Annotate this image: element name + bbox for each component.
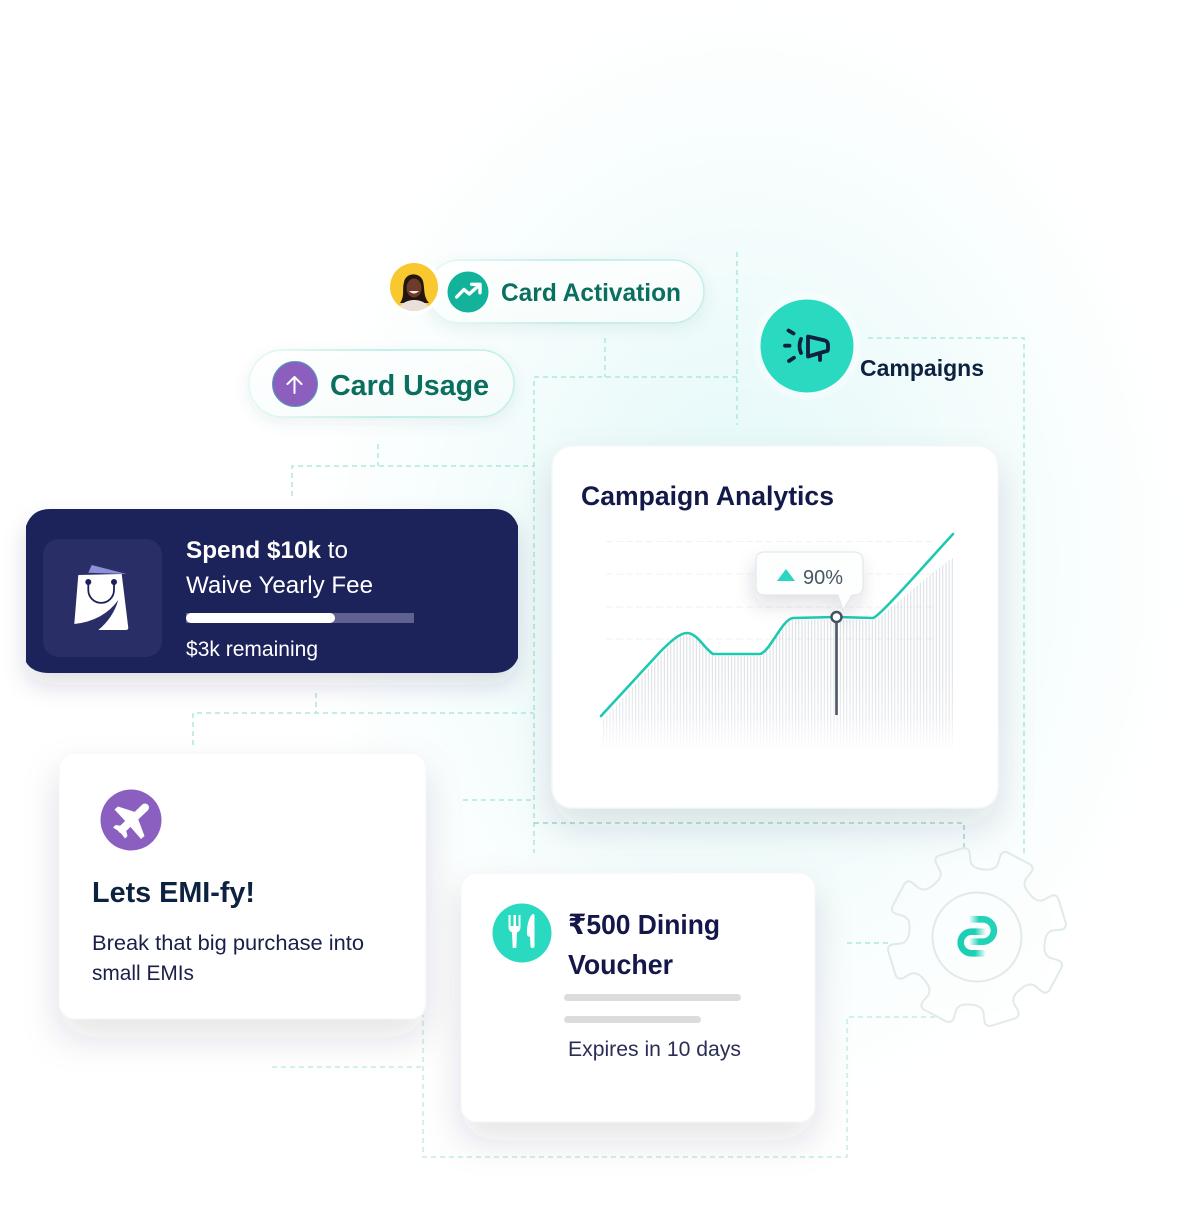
label: Card Usage: Card Usage: [330, 370, 489, 402]
label: Card Activation: Card Activation: [501, 279, 681, 307]
text: EMI description: [92, 932, 364, 985]
panel: Campaign Analytics: [552, 446, 998, 808]
campaigns badge: [753, 292, 861, 400]
icon: airplane: [100, 790, 162, 850]
label: Campaigns: Campaigns: [860, 355, 984, 381]
text: Spend $10k to: Spend $10k to: [186, 537, 348, 564]
heading: 500 Dining Voucher: [568, 909, 720, 980]
panel: dining voucher: [461, 873, 815, 1122]
heading: Campaign Analytics: Campaign Analytics: [581, 481, 834, 511]
tooltip: 90%: 90%: [803, 567, 843, 589]
icon: shopping bag tile: [43, 539, 162, 657]
dashed connector lines: [193, 252, 1024, 1157]
panel: spend offer: [26, 509, 518, 673]
chart: campaign line: [601, 534, 953, 752]
placeholder lines: [564, 994, 741, 1023]
icon: megaphone: [785, 330, 828, 361]
progress bar: [186, 613, 414, 623]
logo mark: [961, 919, 994, 953]
icon: trending up: [448, 272, 488, 312]
text: Expires in 10 days: Expires in 10 days: [568, 1038, 741, 1061]
text: $3k remaining: $3k remaining: [186, 638, 318, 661]
heading: Lets EMI-fy!: Lets EMI-fy!: [92, 877, 255, 909]
marker: data point: [832, 612, 842, 715]
tooltip: 90%: [756, 552, 863, 610]
avatar: [390, 263, 438, 312]
icon: gear outline: [884, 844, 1070, 1030]
panel: Lets EMI-fy: [59, 753, 426, 1019]
icon: up arrow: [272, 362, 318, 406]
text: EMI description: small EMIs: [92, 962, 194, 985]
heading: 500 Dining Voucher: ₹500 Dining: [568, 909, 720, 940]
text: Waive Yearly Fee: Waive Yearly Fee: [186, 572, 373, 599]
gear with logo: [884, 844, 1070, 1030]
text: EMI description: Break that big purchase into: [92, 932, 364, 955]
heading: 500 Dining Voucher: Voucher: [568, 949, 673, 980]
pill: Card Usage: [249, 350, 514, 417]
icon: fork and knife: [492, 904, 552, 962]
pill: Card Activation: [428, 260, 704, 323]
